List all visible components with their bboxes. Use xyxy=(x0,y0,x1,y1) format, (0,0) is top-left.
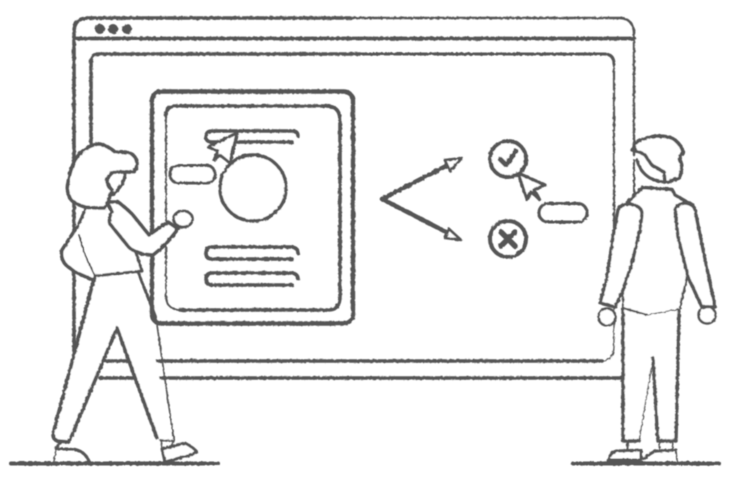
comparison arrows xyxy=(382,158,462,240)
figure: woman xyxy=(53,144,197,462)
left shoe xyxy=(608,450,641,461)
icon: reject cross xyxy=(490,221,526,257)
bag xyxy=(62,230,95,280)
ground under man xyxy=(573,462,719,466)
window frame xyxy=(74,18,350,350)
upper arrow xyxy=(382,165,448,199)
hand xyxy=(174,211,192,227)
lower arrow xyxy=(382,199,448,233)
header divider xyxy=(75,37,634,40)
top bar xyxy=(206,131,298,142)
wireframe card xyxy=(152,92,353,324)
text line one xyxy=(206,247,298,259)
window bottom edge xyxy=(100,376,621,380)
left label pill xyxy=(170,166,215,183)
hair xyxy=(634,136,683,182)
hair xyxy=(67,144,137,208)
left shoe xyxy=(56,442,89,461)
raised arm xyxy=(107,202,178,255)
window controls xyxy=(95,24,132,34)
card inner border xyxy=(166,106,340,310)
selected label pill xyxy=(539,204,587,222)
card outer border xyxy=(152,92,353,324)
hands xyxy=(598,308,616,326)
right arm xyxy=(675,203,715,307)
right shoe xyxy=(162,443,197,462)
ground under woman xyxy=(11,462,218,466)
cursor on approve icon xyxy=(518,173,545,200)
image circle xyxy=(220,155,286,221)
face xyxy=(112,173,125,195)
legs xyxy=(623,305,679,441)
legs xyxy=(53,276,173,441)
left arm xyxy=(600,204,642,307)
figure: man xyxy=(598,136,716,461)
icon: approve check xyxy=(490,141,526,177)
torso xyxy=(78,205,142,276)
torso xyxy=(617,188,693,315)
right shoe xyxy=(644,450,676,459)
browser window xyxy=(74,18,634,378)
content area xyxy=(91,54,360,150)
cursor on card xyxy=(208,133,237,163)
text line two xyxy=(206,273,298,285)
face xyxy=(632,150,665,182)
